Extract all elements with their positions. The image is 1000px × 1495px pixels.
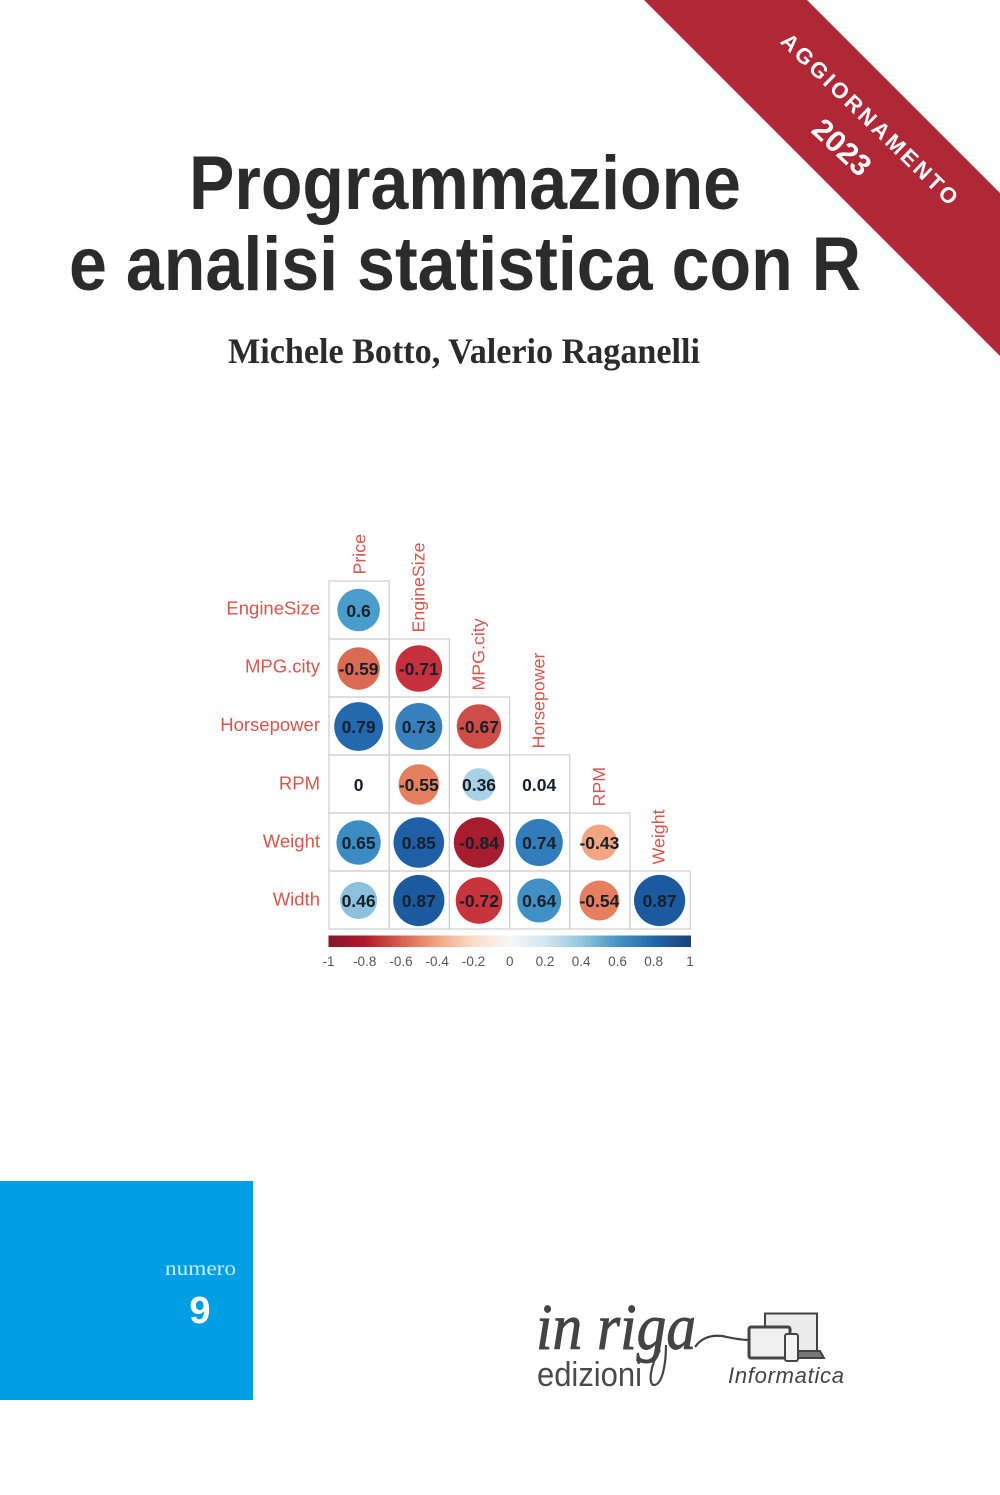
correlation values: 0.46 bbox=[342, 891, 376, 911]
title bbox=[69, 141, 861, 307]
colour scale labels: -0.6 bbox=[389, 954, 413, 969]
correlation circles bbox=[334, 589, 685, 926]
correlation values: 0.73 bbox=[402, 717, 436, 737]
logo script: in riga: in riga bbox=[536, 1291, 696, 1364]
column labels: EngineSize bbox=[408, 542, 428, 632]
correlation values: 0.6 bbox=[346, 601, 371, 621]
correlation values: -0.55 bbox=[399, 775, 439, 795]
colour scale labels: -0.2 bbox=[462, 954, 485, 969]
colour scale labels: 0.8 bbox=[644, 954, 663, 969]
colour scale labels: 0.2 bbox=[536, 954, 554, 969]
row labels: MPG.city bbox=[245, 656, 321, 676]
correlation values: 0.85 bbox=[402, 833, 436, 853]
issue number: 9 bbox=[189, 1290, 211, 1332]
logo caption: informatica: Informatica bbox=[728, 1363, 844, 1388]
row labels: RPM bbox=[279, 772, 320, 794]
column labels: MPG.city bbox=[468, 618, 488, 690]
colour scale labels: -1 bbox=[322, 954, 335, 969]
correlation values: 0.87 bbox=[643, 891, 677, 911]
correlation values: 0.65 bbox=[342, 833, 376, 853]
grid cells bbox=[329, 581, 690, 929]
colour scale labels: 0 bbox=[506, 954, 513, 969]
row labels: Horsepower bbox=[220, 714, 320, 735]
correlation values: 0.87 bbox=[402, 891, 436, 911]
correlation values: -0.67 bbox=[459, 717, 499, 737]
correlation values: -0.59 bbox=[339, 659, 379, 679]
correlation values: 0.36 bbox=[462, 775, 496, 795]
correlation values: -0.72 bbox=[459, 891, 499, 911]
correlation values: -0.54 bbox=[579, 891, 620, 911]
series number box bbox=[0, 1181, 253, 1400]
logo wordmark: edizioni: edizioni bbox=[537, 1356, 642, 1394]
column labels: Price bbox=[350, 534, 370, 574]
title: e analisi statistica con R bbox=[69, 222, 861, 307]
column labels: Weight bbox=[648, 809, 668, 864]
title: Programmazione bbox=[189, 141, 741, 226]
correlation values: 0.64 bbox=[522, 891, 556, 911]
correlation values: -0.43 bbox=[579, 833, 620, 853]
colour scale labels: -0.4 bbox=[426, 954, 449, 969]
colour scale labels: 0.4 bbox=[572, 954, 591, 969]
row labels: Weight bbox=[263, 830, 320, 852]
correlation values: 0.04 bbox=[522, 775, 556, 795]
authors: Michele Botto, Valerio Raganelli bbox=[228, 331, 700, 371]
correlation values: 0.74 bbox=[522, 833, 556, 853]
row labels bbox=[220, 598, 321, 910]
correlation values: 0.79 bbox=[342, 717, 376, 737]
ribbon text: aggiornamento: AGGIORNAMENTO bbox=[776, 28, 963, 210]
colour scale bar bbox=[322, 936, 694, 969]
colour scale labels: 1 bbox=[686, 954, 694, 969]
correlation chart bbox=[220, 534, 694, 969]
column labels: Horsepower bbox=[528, 653, 548, 748]
publisher logo bbox=[536, 1291, 844, 1394]
colour scale labels: -0.8 bbox=[353, 954, 376, 969]
correlation values: -0.71 bbox=[399, 659, 439, 679]
correlation values bbox=[339, 601, 677, 911]
colour scale labels bbox=[322, 954, 694, 969]
logo flourish bbox=[651, 1336, 749, 1385]
colour scale labels: 0.6 bbox=[608, 954, 627, 969]
row labels: Width bbox=[273, 888, 320, 910]
row labels: EngineSize bbox=[226, 598, 320, 618]
corner ribbon bbox=[644, 0, 1000, 356]
numero label: numero bbox=[165, 1258, 236, 1280]
ribbon text: year: 2023 bbox=[805, 112, 877, 183]
column labels: RPM bbox=[589, 767, 609, 806]
icon: devices bbox=[749, 1314, 824, 1361]
column labels bbox=[350, 534, 668, 864]
correlation values: 0 bbox=[354, 775, 364, 795]
correlation values: -0.84 bbox=[459, 833, 499, 853]
